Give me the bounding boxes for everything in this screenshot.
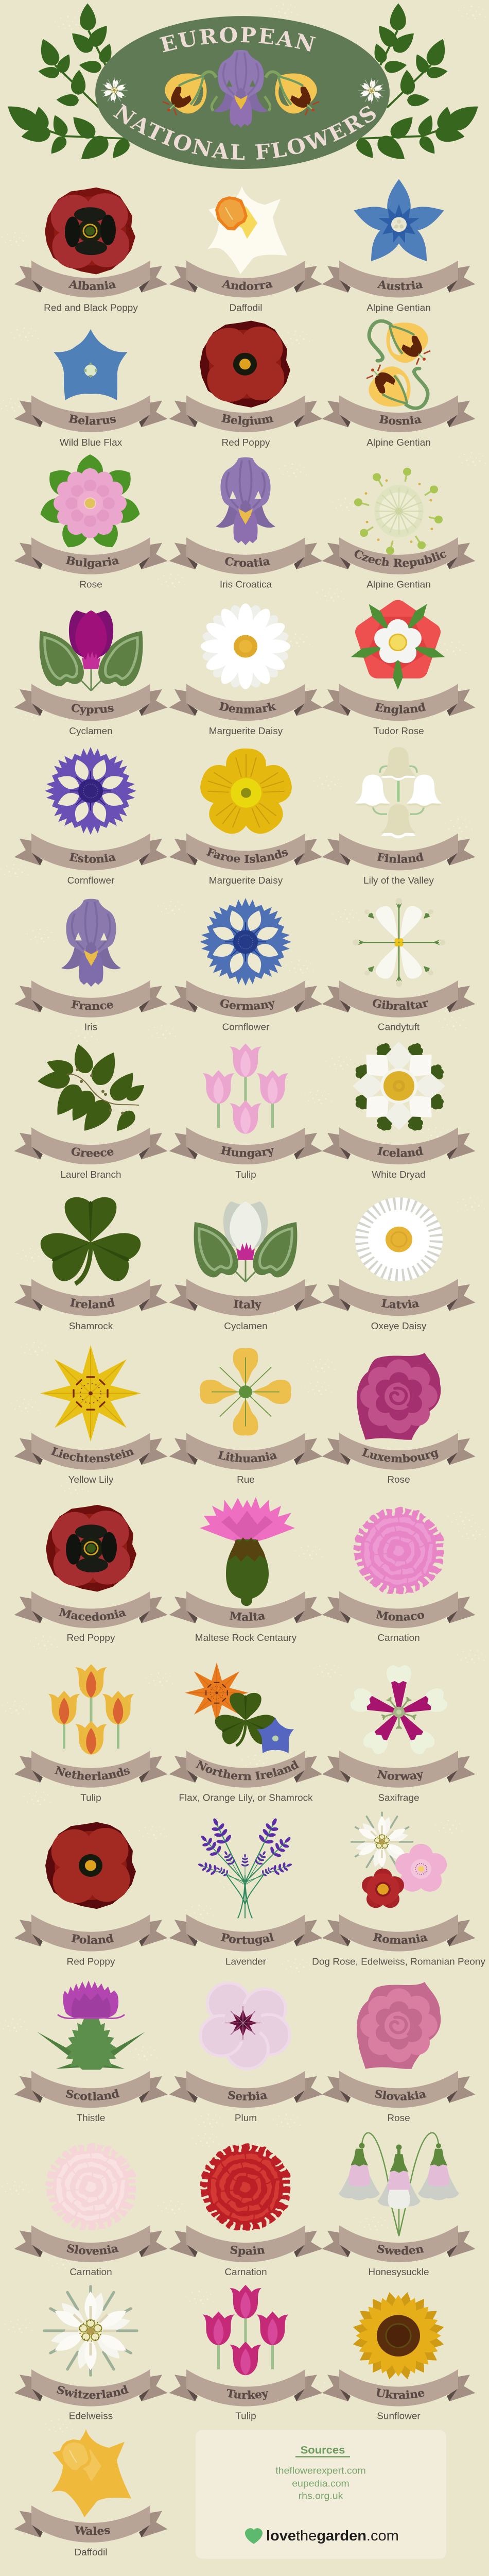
banner: Slovakia (322, 2071, 476, 2108)
banner: Sweden (322, 2225, 476, 2262)
caption: Cornflower (222, 1022, 269, 1032)
banner: Czech Republic: Czech Republic (354, 550, 447, 569)
laurel branches (2, 3, 484, 166)
cell: Poland (14, 1822, 168, 1967)
banner: Italy: Italy (234, 1299, 261, 1311)
caption: Sunflower (377, 2411, 421, 2421)
banner: Denmark: Denmark (219, 702, 276, 714)
flower: lily of the valley (355, 747, 442, 838)
banner: Scotland: Scotland (66, 2089, 120, 2100)
banner: Malta (169, 1591, 322, 1628)
banner: Romania: Romania (373, 1933, 428, 1944)
caption: Carnation (224, 2266, 267, 2277)
banner: Malta: Malta (230, 1612, 266, 1621)
cell: Croatia (169, 457, 322, 589)
banner: Albania (14, 261, 168, 298)
flower: sunflower (298, 2239, 489, 2432)
cell: Estonia (14, 747, 168, 886)
flower: red and black poppy (46, 1505, 136, 1591)
banner: Estonia (14, 834, 168, 870)
cell: Netherlands (14, 1664, 168, 1803)
banner: Bosnia (322, 395, 476, 432)
banner: Andorra (169, 261, 322, 298)
caption: Saxifrage (378, 1792, 420, 1803)
caption: Lavender (225, 1956, 266, 1967)
caption: Tulip (235, 1169, 256, 1180)
cell: Portugal (169, 1815, 322, 1967)
caption: Iris (84, 1022, 97, 1032)
flower: lavender bouquet (196, 1815, 296, 1918)
logo: lovethegarden.com: lovethegarden.com (266, 2528, 399, 2544)
banner: Bosnia: Bosnia (379, 415, 422, 425)
flower: yellow lily (40, 1345, 141, 1442)
banner: Italy (169, 1279, 322, 1316)
flower: white cyclamen (194, 1201, 297, 1282)
caption: Rose (387, 1474, 410, 1485)
banner: Slovakia: Slovakia (373, 2088, 427, 2104)
caption: Cornflower (67, 875, 114, 886)
banner: Denmark (169, 684, 322, 721)
banner: Spain: Spain (229, 2244, 266, 2258)
cell: Switzerland (14, 2283, 168, 2421)
banner: Wales (14, 2505, 168, 2543)
banner: Belgium: Belgium (221, 414, 274, 428)
banner: Albania: Albania (68, 280, 116, 291)
flower: red carnation (204, 2148, 287, 2227)
banner: Ukraine (322, 2369, 476, 2406)
caption: Honesysuckle (368, 2266, 429, 2277)
banner: Norway: Norway (377, 1770, 423, 1781)
banner: Finland: Finland (377, 852, 424, 863)
banner: Faroe Islands: Faroe Islands (206, 848, 288, 863)
cell: Sweden (322, 2133, 476, 2277)
cell: Belgium (169, 320, 322, 448)
caption: Flax, Orange Lily, or Shamrock (179, 1792, 313, 1803)
flower: saxifrage (348, 1665, 449, 1757)
caption: Wild Blue Flax (60, 437, 123, 448)
cell: Ukraine (298, 2239, 489, 2432)
caption: Rose (387, 2112, 410, 2123)
cell: Slovakia (322, 1982, 476, 2123)
banner: France (14, 980, 168, 1018)
flower: red poppy (200, 320, 290, 408)
caption: White Dryad (372, 1169, 426, 1180)
caption: Rue (237, 1474, 255, 1485)
banner: Turkey: Turkey (225, 2387, 270, 2402)
cell: Bulgaria (14, 454, 168, 589)
caption: Marguerite Daisy (209, 725, 283, 736)
banner: Monaco (322, 1591, 476, 1628)
source links: theflowerexpert.com (275, 2466, 366, 2477)
banner: Bulgaria: Bulgaria (66, 555, 119, 569)
caption: Iris Croatica (220, 579, 272, 589)
cell: Greece (14, 1042, 168, 1180)
flower: plum blossom (200, 1983, 290, 2069)
banner: Netherlands (14, 1751, 168, 1788)
banner: Hungary (169, 1127, 322, 1164)
banner: Germany (169, 980, 322, 1018)
flower: cyclamen (40, 611, 143, 691)
caption: Alpine Gentian (366, 579, 431, 589)
caption: Cyclamen (224, 1320, 268, 1331)
caption: Carnation (377, 1633, 420, 1643)
banner: France: France (71, 1000, 113, 1010)
caption: Maltese Rock Centaury (195, 1633, 297, 1643)
cell: Slovenia (14, 2147, 168, 2277)
cell: Finland (322, 747, 476, 886)
banner: Spain (169, 2225, 322, 2262)
banner: Croatia: Croatia (225, 557, 271, 567)
flower: daffodil (207, 186, 287, 274)
banner: Cyprus (14, 684, 168, 721)
cell: Bosnia (322, 321, 476, 448)
banner: Portugal: Portugal (220, 1933, 274, 1946)
banner: Switzerland: Switzerland (55, 2383, 130, 2402)
cell: Spain (169, 2148, 322, 2277)
cell: Germany (169, 898, 322, 1032)
caption: Tulip (235, 2411, 256, 2421)
banner: Slovenia (14, 2225, 168, 2262)
flower: purple cornflower (45, 747, 136, 835)
caption: Cyclamen (69, 725, 113, 736)
banner: Portugal (169, 1914, 322, 1952)
banner: Andorra: Andorra (221, 280, 273, 291)
flower: magenta tulips (203, 2285, 288, 2375)
banner: Serbia (169, 2071, 322, 2108)
flower: laurel branch (37, 1042, 148, 1137)
caption: Daffodil (229, 302, 263, 313)
flower: edelweiss, dog rose and peony (350, 1810, 447, 1908)
flower: alpine gentian (350, 179, 448, 268)
banner: Netherlands: Netherlands (55, 1766, 130, 1781)
flower: red poppy (45, 1822, 136, 1909)
cell: Austria (322, 179, 476, 313)
oval badge (95, 16, 390, 169)
cell: Czech Republic (322, 468, 476, 589)
flower: oxeye daisy (362, 1204, 436, 1275)
caption: Edelweiss (69, 2411, 113, 2421)
banner: Greece: Greece (71, 1147, 113, 1157)
banner: Lithuania: Lithuania (217, 1451, 277, 1463)
flower: blue cornflower (200, 898, 291, 986)
banner: Latvia (322, 1279, 476, 1316)
flower: pink carnation (358, 1511, 440, 1590)
banner: Sweden: Sweden (376, 2243, 425, 2258)
banner: Scotland (14, 2071, 168, 2108)
flower: shamrock (37, 1197, 144, 1286)
banner: England: England (375, 702, 426, 716)
banner: Estonia: Estonia (69, 852, 116, 863)
source links: rhs.org.uk (299, 2491, 343, 2501)
cell: England (322, 601, 476, 736)
caption: Red Poppy (67, 1956, 115, 1967)
caption: Daffodil (74, 2547, 108, 2557)
cell: Northern Ireland (169, 1663, 322, 1803)
banner: Belarus: Belarus (68, 414, 116, 425)
cell: Italy (169, 1201, 322, 1331)
caption: Alpine Gentian (366, 302, 431, 313)
flower: pink rose (357, 1982, 441, 2069)
cell: Monaco (322, 1511, 476, 1643)
banner: Czech Republic (322, 537, 476, 574)
banner: Luxembourg (322, 1433, 476, 1470)
caption: Plum (235, 2112, 257, 2123)
cell: Latvia (322, 1204, 476, 1331)
cell: Scotland (14, 1980, 168, 2123)
flower: yellow daffodil (51, 2429, 131, 2517)
flower: iris (61, 899, 121, 987)
banner: Wales: Wales (73, 2524, 111, 2538)
caption: Tulip (80, 1792, 101, 1803)
banner: Germany: Germany (220, 999, 275, 1010)
caption: Thistle (77, 2112, 105, 2123)
banner: Turkey (169, 2369, 322, 2406)
cell: Faroe Islands (169, 749, 322, 886)
caption: Candytuft (378, 1022, 420, 1032)
banner: Greece (14, 1127, 168, 1164)
flower: Bosnian lily pair (366, 321, 430, 408)
banner: Faroe Islands (169, 834, 322, 870)
flower: pink tulips (203, 1043, 288, 1134)
flower: wild blue flax (54, 329, 128, 400)
caption: Alpine Gentian (366, 437, 431, 448)
source links (275, 2466, 366, 2501)
cell: Liechtenstein (14, 1345, 168, 1485)
banner: Austria: Austria (377, 280, 423, 291)
flower: alpine gentian seed head (354, 468, 443, 554)
caption: Rose (79, 579, 102, 589)
banner: Gibraltar: Gibraltar (373, 999, 428, 1010)
flower: yellow tulips (48, 1664, 134, 1754)
cell: Malta (169, 1497, 322, 1643)
flower: iris croatica (216, 457, 275, 545)
caption: Red Poppy (67, 1633, 115, 1643)
cell: Macedonia (14, 1505, 168, 1643)
banner: Macedonia (14, 1591, 168, 1628)
source links: eupedia.com (292, 2479, 350, 2489)
banner: Liechtenstein (14, 1433, 168, 1470)
cell: Albania (14, 188, 168, 313)
cell: Turkey (169, 2285, 322, 2421)
banner: Slovenia: Slovenia (65, 2242, 120, 2258)
banner: Finland (322, 834, 476, 870)
banner: Iceland (322, 1127, 476, 1164)
caption: Laurel Branch (60, 1169, 121, 1180)
caption: Lily of the Valley (363, 875, 434, 886)
banner: Gibraltar (322, 980, 476, 1018)
flower: candytuft (353, 898, 445, 987)
banner: Bulgaria (14, 537, 168, 574)
banner: Iceland: Iceland (377, 1146, 424, 1157)
cell: Cyprus (14, 611, 168, 736)
heading: Sources: Sources (301, 2444, 345, 2456)
banner: Lithuania (169, 1433, 322, 1470)
banner: Liechtenstein: Liechtenstein (50, 1447, 134, 1463)
caption: Carnation (69, 2266, 112, 2277)
caption: Shamrock (69, 1320, 113, 1331)
cell: Wales (14, 2429, 168, 2557)
banner: Serbia: Serbia (228, 2091, 268, 2100)
title line: National Flowers: NATIONAL FLOWERS (113, 104, 376, 160)
banner: Northern Ireland: Northern Ireland (196, 1760, 300, 1781)
flower: red and black poppy (45, 188, 135, 274)
banner: Poland: Poland (71, 1934, 114, 1944)
banner: Belarus (14, 395, 168, 432)
flower: edelweiss (43, 2283, 138, 2379)
cell: Ireland (14, 1197, 168, 1331)
caption: Dog Rose, Edelweiss, Romanian Peony (312, 1956, 486, 1967)
cell: Gibraltar (322, 898, 476, 1032)
flower: tudor rose (350, 601, 446, 690)
flower: pale carnation (50, 2147, 132, 2226)
flower: marguerite daisy (201, 603, 290, 689)
caption: Marguerite Daisy (209, 875, 283, 886)
badge flowers (101, 50, 385, 128)
cell: Lithuania (169, 1348, 322, 1485)
banner: Austria (322, 261, 476, 298)
cell: Hungary (169, 1043, 322, 1180)
cell: Denmark (169, 603, 322, 736)
title line: European: EUROPEAN (160, 27, 316, 53)
banner: Hungary: Hungary (220, 1146, 274, 1159)
caption: Red and Black Poppy (44, 302, 138, 313)
banner: Poland (14, 1914, 168, 1952)
flower: honeysuckle (339, 2133, 459, 2236)
cell: Luxembourg (322, 1353, 476, 1485)
banner: Belgium (169, 395, 322, 432)
banner: England (322, 684, 476, 721)
caption: Red Poppy (222, 437, 270, 448)
flower: orange lily, shamrock and flax (185, 1663, 294, 1753)
flower: thistle (37, 1980, 145, 2070)
cell: Norway (322, 1665, 476, 1803)
icon: green heart (245, 2528, 263, 2544)
banner: Ireland (14, 1279, 168, 1316)
caption: Tudor Rose (373, 725, 424, 736)
banner: Luxembourg: Luxembourg (361, 1448, 439, 1463)
banner: Monaco: Monaco (376, 1611, 424, 1621)
cell: Serbia (169, 1983, 322, 2123)
banner: Ukraine: Ukraine (374, 2386, 426, 2402)
header: laurel, oval badge and title (8, 3, 478, 169)
flower: rue (200, 1348, 291, 1436)
flower: maltese rock centaury (200, 1497, 295, 1606)
flower: magenta rose (357, 1353, 441, 1440)
cell: Iceland (322, 1042, 476, 1180)
cell: Belarus (14, 329, 168, 448)
banner: Latvia: Latvia (381, 1299, 420, 1309)
banner: Norway (322, 1751, 476, 1788)
banner: Macedonia: Macedonia (59, 1607, 127, 1621)
banner: Croatia (169, 537, 322, 574)
banner: Switzerland (14, 2369, 168, 2406)
caption: Yellow Lily (68, 1474, 114, 1485)
panel: sources and logo (196, 2430, 446, 2558)
cell: France (14, 899, 168, 1032)
flower: rose (38, 454, 143, 553)
caption: Oxeye Daisy (371, 1320, 427, 1331)
banner: Cyprus: Cyprus (71, 704, 114, 716)
banner: Romania (322, 1914, 476, 1952)
banner: Ireland: Ireland (70, 1298, 115, 1309)
flower: marsh marigold (196, 749, 296, 840)
cell: Romania (312, 1810, 486, 1967)
cell: Andorra (169, 187, 322, 313)
flower: white dryad (353, 1042, 445, 1131)
banner: Northern Ireland (169, 1751, 322, 1788)
